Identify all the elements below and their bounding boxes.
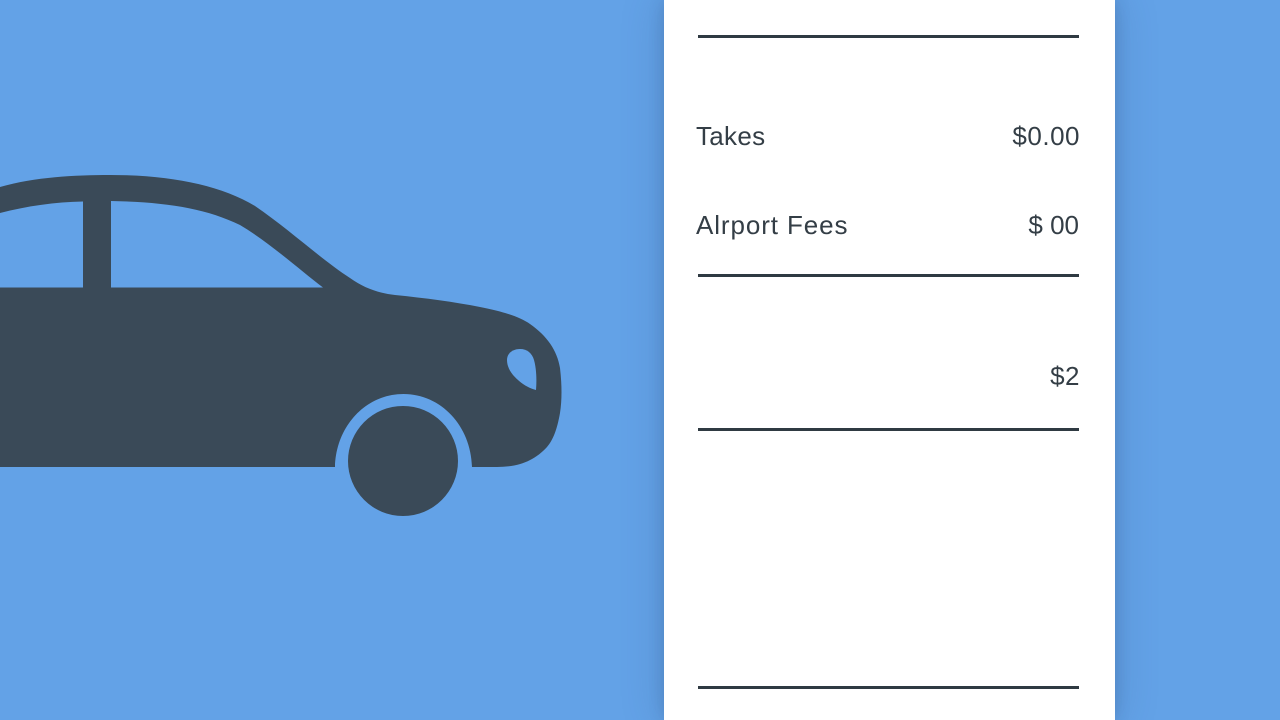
value: total: $2: [1050, 361, 1080, 391]
label: taxes: Takes: [696, 121, 765, 151]
value: airport fees: $ 00: [1028, 210, 1079, 240]
icon: car: [0, 175, 562, 516]
value: taxes: $0.00: [1012, 121, 1080, 151]
label: airport fees: Alrport Fees: [696, 210, 848, 240]
panel: receipt: [664, 0, 1115, 720]
divider line 3: [698, 428, 1079, 431]
divider line 2: [698, 274, 1079, 277]
divider line 1: [698, 35, 1079, 38]
divider line 4: [698, 686, 1079, 689]
